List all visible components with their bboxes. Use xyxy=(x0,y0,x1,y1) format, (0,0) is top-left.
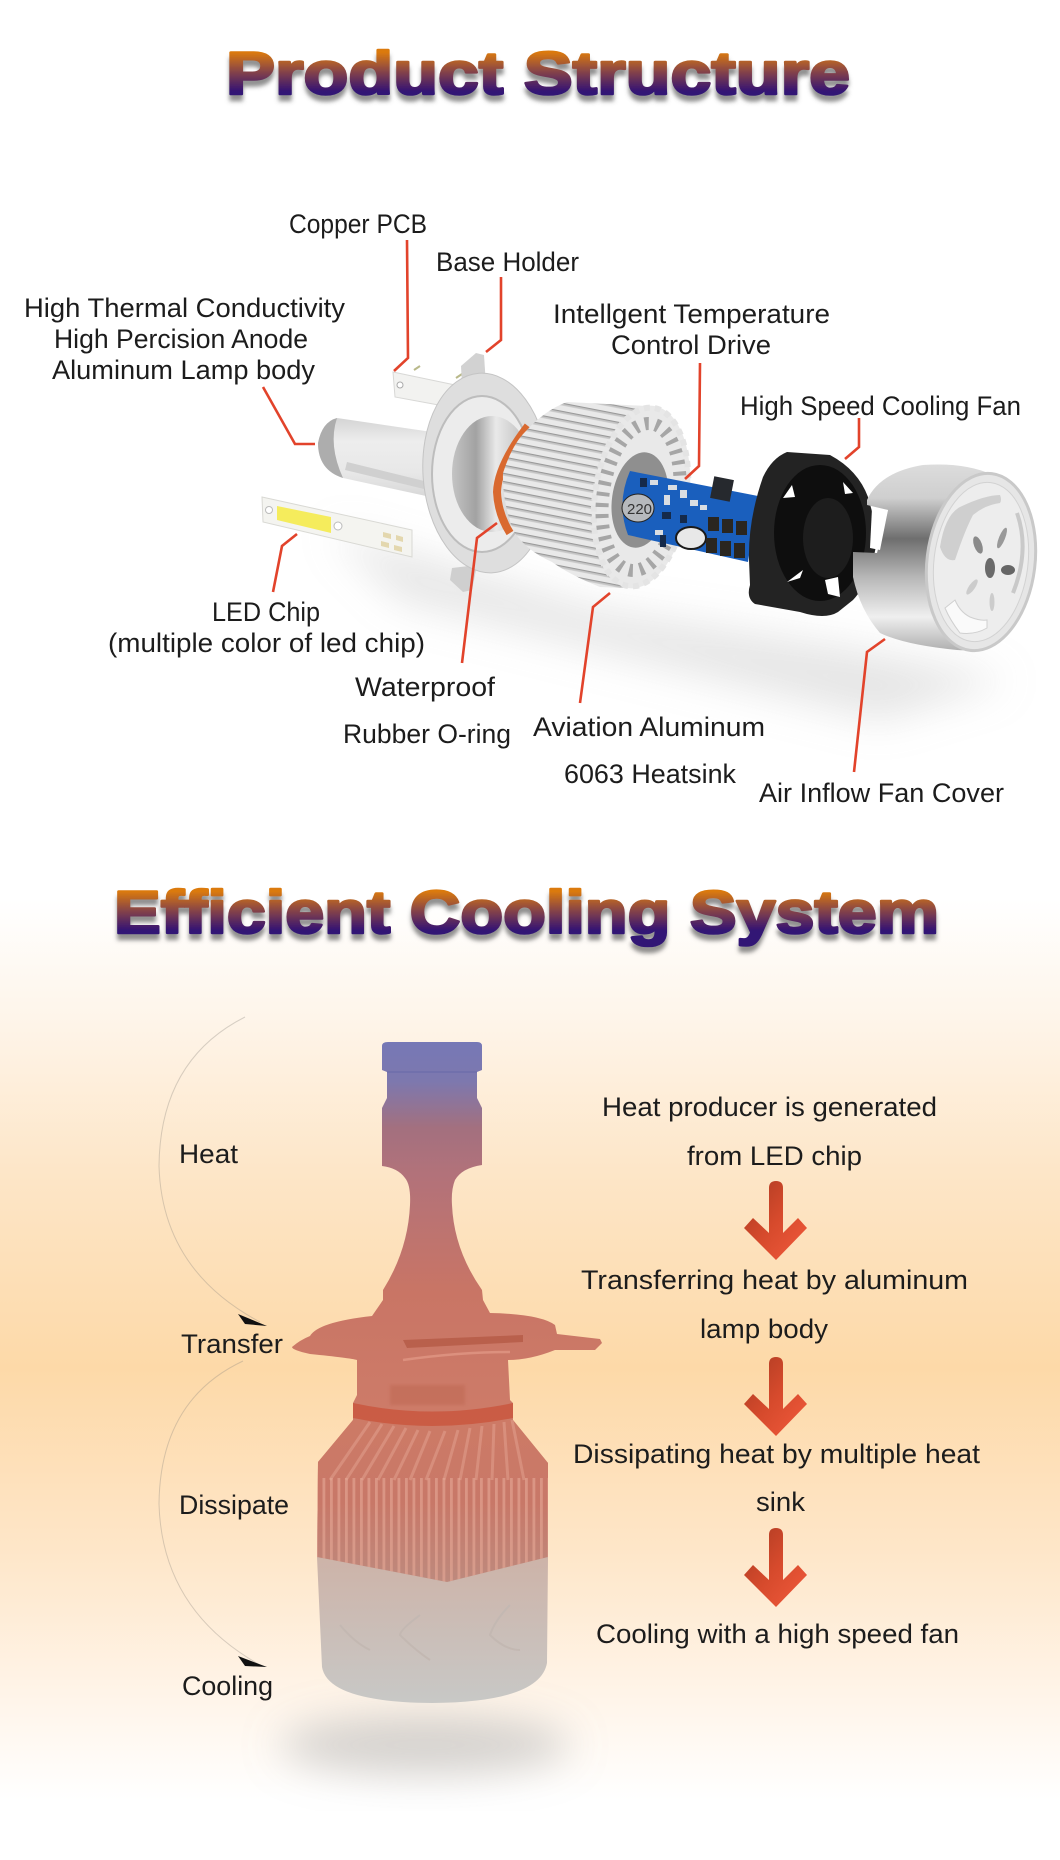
icon: heatsink xyxy=(503,399,701,595)
arrow down 2 xyxy=(744,1357,807,1436)
label: heatsink xyxy=(533,712,765,789)
label: control drive: Control Drive xyxy=(611,330,771,360)
title: Efficient Cooling System: Efficient Cooling System xyxy=(114,879,939,946)
label: fan cover: Air Inflow Fan Cover xyxy=(759,778,1004,808)
label: Cooling: Cooling xyxy=(182,1671,273,1701)
arrow down 3 xyxy=(744,1528,807,1607)
step: dissipating heat xyxy=(573,1439,981,1517)
label: Base Holder: Base Holder xyxy=(436,247,579,277)
label: lamp body xyxy=(24,293,345,385)
label: Transfer: Transfer xyxy=(181,1329,283,1359)
icon: LED chip xyxy=(262,497,412,557)
icon: base holder xyxy=(416,353,556,592)
step: dissipating heat: sink xyxy=(756,1487,806,1517)
icon: drive circuit board: 220 xyxy=(627,501,652,518)
label: lamp body: High Thermal Conductivity xyxy=(24,293,345,323)
label: LED chip: (multiple color of led chip) xyxy=(108,628,425,658)
label: Copper PCB: Copper PCB xyxy=(289,209,427,239)
label: control drive xyxy=(553,299,830,360)
soft floor shadow xyxy=(330,530,1010,720)
step: dissipating heat: Dissipating heat by multiple heat xyxy=(573,1439,981,1469)
step: transferring heat: lamp body xyxy=(700,1314,829,1344)
icon: air inflow fan cover xyxy=(853,464,1045,657)
arrow down 1 xyxy=(744,1181,807,1260)
arrowhead xyxy=(238,1314,267,1326)
background: cooling section gradient xyxy=(0,900,1060,1800)
step: heat producer: from LED chip xyxy=(687,1141,862,1171)
label: O-ring xyxy=(343,672,511,749)
icon: copper PCB strip xyxy=(393,366,462,408)
icon: rubber O-ring xyxy=(497,426,528,533)
bulb floor shadow xyxy=(280,1715,570,1775)
step: cooling with fan: Cooling with a high speed fan xyxy=(596,1619,959,1649)
exploded lamp illustration xyxy=(262,353,1045,720)
label: cooling fan: High Speed Cooling Fan xyxy=(740,391,1021,421)
arc: dissipate to cooling xyxy=(159,1361,267,1667)
label: Heat: Heat xyxy=(179,1139,239,1169)
label: lamp body: High Percision Anode xyxy=(54,324,308,354)
icon: aluminum lamp body xyxy=(318,418,432,496)
label: heatsink: Aviation Aluminum xyxy=(533,712,765,742)
step: transferring heat: Transferring heat by aluminum xyxy=(581,1265,968,1295)
title: Product Structure: Product Structure xyxy=(226,40,850,107)
icon: drive circuit board xyxy=(622,471,758,562)
icon: cooling fan xyxy=(749,452,878,616)
label: LED chip xyxy=(108,597,425,658)
label: lamp body: Aluminum Lamp body xyxy=(52,355,315,385)
step: transferring heat xyxy=(581,1265,968,1344)
arc: heat to transfer xyxy=(159,1017,267,1326)
heat-coloured bulb xyxy=(292,1042,602,1703)
label: O-ring: Rubber O-ring xyxy=(343,719,511,749)
arrowhead xyxy=(238,1656,267,1667)
label: LED chip: LED Chip xyxy=(212,597,320,627)
step: heat producer xyxy=(602,1092,937,1171)
label: O-ring: Waterproof xyxy=(355,672,496,702)
label: heatsink: 6063 Heatsink xyxy=(564,759,736,789)
label: control drive: Intellgent Temperature xyxy=(553,299,830,329)
label: Dissipate: Dissipate xyxy=(179,1490,289,1520)
callout lines xyxy=(263,240,885,772)
bulb details xyxy=(317,1072,549,1660)
step: heat producer: Heat producer is generated xyxy=(602,1092,937,1122)
